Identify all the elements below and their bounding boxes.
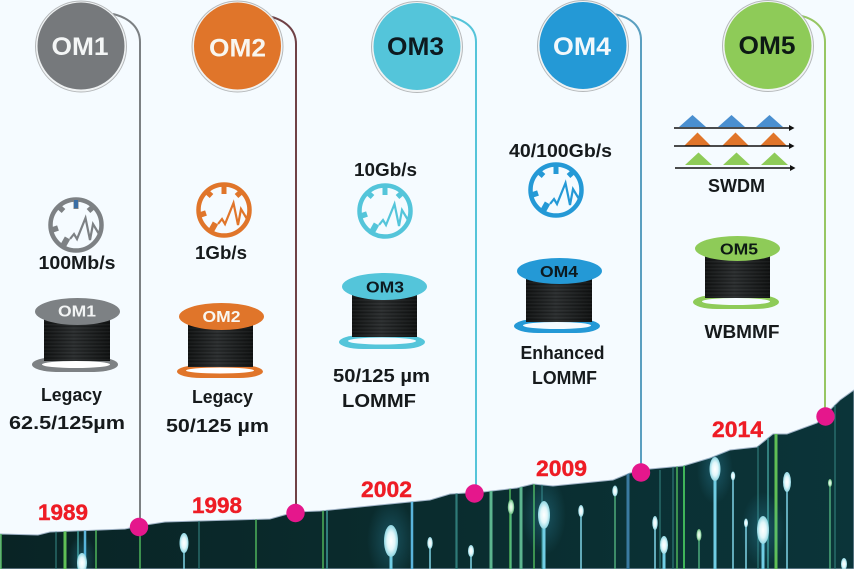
badge: OM4: OM4 — [553, 33, 611, 61]
connector: OM2 to timeline — [268, 16, 296, 512]
speed label: 10Gb/s — [354, 159, 417, 180]
fiber spool: OM4 — [514, 258, 602, 333]
core size: 50/125 µm — [166, 415, 269, 436]
chart: SWDM wavelength channels — [674, 115, 796, 171]
panel: OM4 — [509, 0, 650, 482]
fiber spool: OM1 — [32, 298, 120, 372]
badge: OM5 — [722, 0, 814, 92]
fiber type: Enhanced — [520, 342, 604, 363]
fiber spool: OM2 — [177, 303, 264, 378]
connector: OM1 to timeline — [113, 14, 140, 526]
icon: speed gauge — [198, 184, 250, 236]
timeline dot — [130, 518, 148, 536]
timeline dot — [465, 484, 484, 503]
fiber class: LOMMF — [532, 367, 597, 388]
core size: 62.5/125µm — [9, 412, 125, 433]
icon: speed gauge — [530, 164, 582, 216]
year: 2009: 2009 — [536, 456, 587, 481]
badge: OM4 — [538, 0, 628, 92]
icon: speed gauge — [50, 200, 102, 250]
badge: OM1 — [36, 1, 126, 92]
panel: OM2 — [166, 1, 305, 522]
speed label: 100Mb/s — [38, 252, 116, 273]
timeline dot — [816, 407, 835, 426]
badge: OM3: OM3 — [387, 33, 444, 61]
speed label: 1Gb/s — [195, 242, 247, 263]
year: 1998: 1998 — [192, 493, 242, 518]
fiber spool: OM5: OM5 — [720, 242, 758, 258]
badge: OM2: OM2 — [209, 34, 266, 62]
panel: OM1 — [9, 1, 148, 536]
panel: OM3 — [333, 2, 484, 503]
icon: speed gauge — [360, 186, 410, 236]
badge: OM3 — [372, 2, 462, 92]
fiber type: Legacy — [192, 386, 254, 407]
ground: dark fiber field rising left to right — [0, 390, 854, 569]
year: 2014: 2014 — [712, 417, 764, 442]
timeline dot — [286, 504, 305, 522]
panel: OM5 — [674, 0, 835, 442]
badge: OM2 — [192, 1, 283, 92]
fiber spool: OM3: OM3 — [366, 280, 404, 296]
fiber type: LOMMF — [342, 390, 416, 411]
timeline dot — [632, 463, 650, 482]
connector: OM3 to timeline — [448, 16, 476, 492]
core size: 50/125 µm — [333, 365, 430, 386]
badge: OM1: OM1 — [52, 33, 109, 61]
fiber spool: OM2: OM2 — [202, 309, 240, 326]
connector: OM5 to timeline — [797, 15, 825, 416]
fiber spool: OM4: OM4 — [540, 264, 578, 281]
fiber type: Legacy — [41, 384, 103, 405]
fiber type: WBMMF — [704, 321, 780, 342]
fiber spool: OM1: OM1 — [58, 304, 96, 320]
connector: OM4 to timeline — [613, 14, 641, 472]
year: 1989: 1989 — [38, 500, 88, 525]
fiber spool: OM5 — [693, 236, 780, 309]
year: 2002: 2002 — [361, 477, 412, 502]
speed label: 40/100Gb/s — [509, 140, 612, 161]
fiber spool: OM3 — [339, 273, 427, 349]
technology label: SWDM — [708, 175, 765, 196]
badge: OM5: OM5 — [738, 32, 796, 60]
